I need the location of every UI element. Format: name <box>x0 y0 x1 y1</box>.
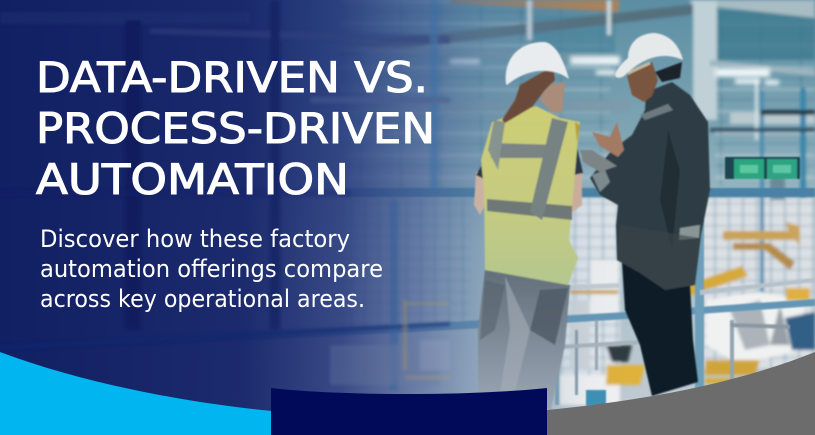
dark shirt sleeves <box>476 150 495 180</box>
ceiling lights <box>450 56 779 85</box>
trousers <box>478 270 570 410</box>
subtitle: across key operational areas. <box>40 285 365 313</box>
title: PROCESS-DRIVEN <box>36 104 435 153</box>
subtitle: Discover how these factory <box>40 225 350 253</box>
worker in dark jacket <box>580 33 710 396</box>
faded factory structure in overlay <box>0 0 450 390</box>
navy center tab <box>271 388 547 435</box>
dark jeans <box>622 262 698 396</box>
title: AUTOMATION <box>36 155 349 204</box>
title <box>36 53 435 204</box>
raised hand <box>592 122 624 157</box>
bare arms <box>474 172 488 215</box>
dark hair <box>655 62 682 82</box>
white hard hat <box>506 42 569 85</box>
glasses <box>628 63 650 73</box>
jacket <box>590 82 710 290</box>
green status screens <box>725 157 800 179</box>
ceiling beams <box>340 4 695 56</box>
subtitle: automation offerings compare <box>40 255 383 283</box>
worker in safety vest <box>474 42 583 410</box>
neck and hair <box>540 82 565 113</box>
white machines <box>706 292 805 365</box>
railings <box>0 188 815 406</box>
gray curved band <box>547 352 815 435</box>
face <box>627 62 658 102</box>
yellow robots <box>686 266 748 296</box>
subtitle <box>40 225 383 313</box>
safety vest <box>481 106 580 285</box>
dark silhouettes <box>770 170 785 200</box>
light blue curved band <box>0 352 272 435</box>
tablet <box>580 150 617 172</box>
title: DATA-DRIVEN VS. <box>36 53 428 102</box>
white hard hat <box>615 33 683 78</box>
